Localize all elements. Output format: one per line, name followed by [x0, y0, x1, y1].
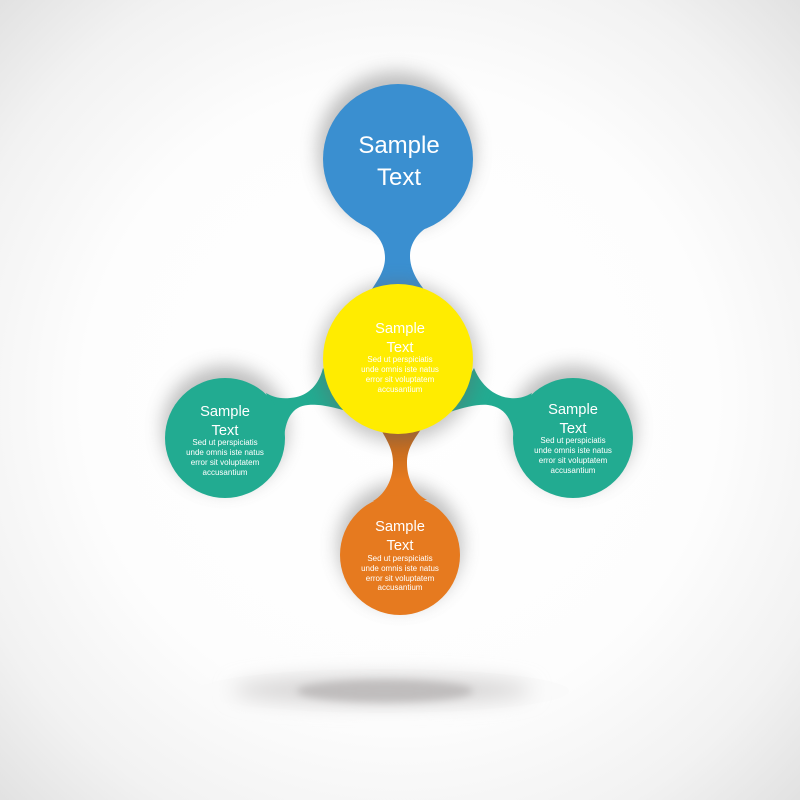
floor shadow	[197, 669, 569, 713]
left green label: error sit voluptatem	[191, 458, 260, 467]
right green label: Sample	[548, 402, 598, 418]
right green label: accusantium	[551, 466, 596, 475]
yellow label: Sed ut perspiciatis	[367, 355, 433, 364]
branch: right green	[450, 368, 633, 498]
left green label: Sed ut perspiciatis	[192, 438, 258, 447]
branch: blue	[323, 84, 473, 292]
left green neck	[266, 368, 350, 440]
right green label	[534, 402, 612, 475]
right green label: Sed ut perspiciatis	[540, 436, 606, 445]
blue node	[323, 84, 473, 234]
node shadows	[163, 72, 635, 607]
right green node	[513, 378, 633, 498]
orange label: Text	[387, 538, 413, 554]
orange label: error sit voluptatem	[366, 574, 435, 583]
orange neck	[373, 428, 427, 501]
orange label: unde omnis iste natus	[361, 564, 439, 573]
branch: orange	[340, 428, 460, 615]
left green label: accusantium	[203, 468, 248, 477]
yellow label: Sample	[375, 321, 425, 337]
yellow centre node	[323, 284, 473, 434]
orange node	[340, 495, 460, 615]
orange label: Sed ut perspiciatis	[367, 554, 433, 563]
blue label	[358, 132, 440, 191]
yellow node shadow	[318, 282, 478, 442]
orange label: accusantium	[378, 583, 423, 592]
left green label: Text	[212, 423, 238, 439]
right green neck	[450, 368, 532, 440]
left green label: unde omnis iste natus	[186, 448, 264, 457]
right green label: Text	[560, 421, 586, 437]
yellow label: unde omnis iste natus	[361, 365, 439, 374]
yellow label	[361, 321, 439, 394]
left green label	[186, 404, 264, 477]
blue label: Text	[377, 164, 421, 191]
left green node	[165, 378, 285, 498]
yellow label: accusantium	[378, 385, 423, 394]
blue label: Sample	[358, 132, 440, 159]
yellow label: error sit voluptatem	[366, 375, 435, 384]
orange label: Sample	[375, 519, 425, 535]
orange label	[361, 519, 439, 592]
branch: left green	[165, 368, 350, 498]
yellow label: Text	[387, 340, 413, 356]
left green label: Sample	[200, 404, 250, 420]
right green label: error sit voluptatem	[539, 456, 608, 465]
blue neck	[363, 224, 433, 292]
right green label: unde omnis iste natus	[534, 446, 612, 455]
